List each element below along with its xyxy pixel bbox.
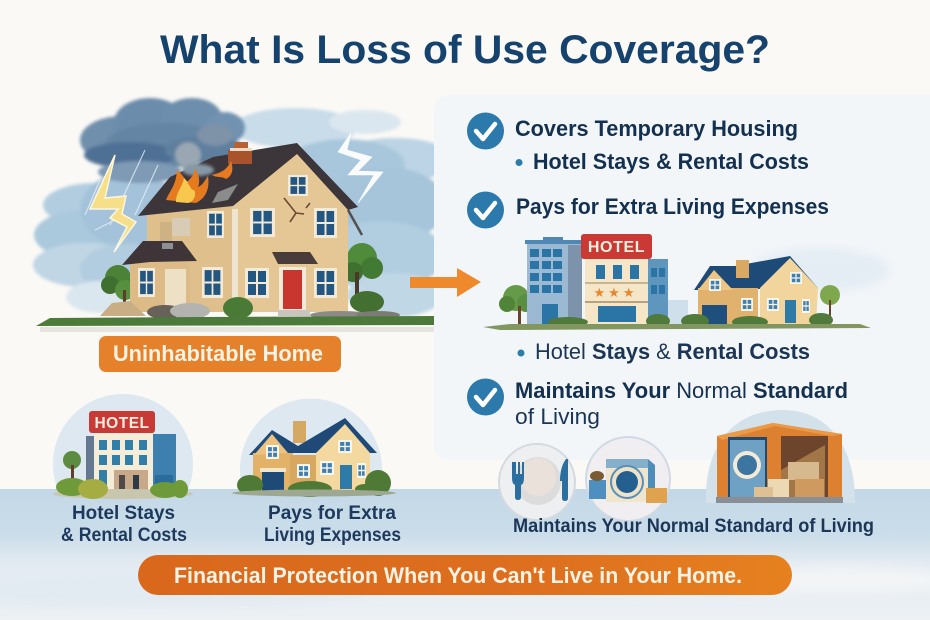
icon: storage unit [706, 410, 855, 503]
item: maintains standard of living: Maintains Your Normal Standard [515, 378, 848, 403]
ground and rubble [278, 310, 310, 316]
illustration: storm clouds [33, 98, 455, 317]
trees [105, 265, 131, 291]
icon: hotel (small) [53, 394, 193, 499]
water band background [0, 489, 930, 620]
smoke [175, 124, 233, 176]
flames [166, 168, 208, 203]
windows [172, 218, 190, 236]
title: What Is Loss of Use Coverage? [160, 28, 770, 72]
item: covers temporary housing [467, 112, 809, 174]
callout: financial protection [138, 555, 792, 595]
porch roof [122, 241, 197, 265]
label: maintains your normal standard of living: Maintains Your Normal Standard of Living [513, 516, 874, 537]
rain streaks [85, 150, 158, 230]
icon: hotel (small): HOTEL [94, 415, 150, 432]
label: pays for extra living expenses [264, 503, 401, 546]
icon: yellow lightning bolt [90, 155, 136, 252]
bullet: hotel stays and rental costs: Hotel Stays & Rental Costs [535, 339, 810, 364]
walls [147, 152, 348, 312]
arrow [410, 268, 481, 297]
label: hotel stays and rental costs: Hotel Stays [72, 503, 175, 524]
rental house [694, 256, 818, 325]
label: hotel stays and rental costs [61, 503, 187, 546]
icon: house (small) [232, 399, 396, 497]
tower [527, 242, 581, 325]
stars: ★★★ [594, 285, 637, 300]
cracks [284, 198, 310, 222]
callout: financial protection: Financial Protection When You Can't Live in Your Home. [174, 563, 742, 588]
right tree [820, 285, 840, 305]
illustration: damaged house [36, 124, 434, 332]
item: pays for extra living expenses: Pays for Extra Living Expenses [516, 194, 829, 219]
label: hotel stays and rental costs: & Rental Costs [61, 525, 187, 546]
icon: washing machine [586, 437, 670, 521]
ground [548, 313, 833, 328]
item: maintains standard of living: of Living [515, 404, 600, 429]
icon: plate and cutlery [499, 444, 575, 520]
roof [138, 143, 358, 216]
left tree [503, 285, 529, 311]
hotel sign [581, 234, 652, 259]
chimney [228, 150, 252, 164]
label: pays for extra living expenses: Living Expenses [264, 525, 401, 546]
item: covers temporary housing: Hotel Stays & Rental Costs [533, 149, 809, 174]
doors [165, 269, 186, 308]
label: pays for extra living expenses: Pays for Extra [268, 503, 396, 524]
item: maintains standard of living [467, 378, 848, 429]
hotel sign: HOTEL [588, 239, 645, 256]
illustration: hotel and rental house [483, 234, 890, 330]
label: Uninhabitable Home [99, 336, 341, 372]
icon: white lightning bolt [338, 133, 383, 203]
icon: check [467, 112, 504, 150]
hotel body [585, 259, 648, 325]
label: Uninhabitable Home: Uninhabitable Home [113, 341, 323, 366]
panel: coverage benefits [434, 95, 930, 460]
icon: check [467, 378, 504, 416]
item: pays for extra living expenses [467, 192, 829, 228]
icon: check [467, 192, 504, 228]
door canopy [272, 252, 318, 264]
item: covers temporary housing: Covers Temporary Housing [515, 116, 798, 141]
